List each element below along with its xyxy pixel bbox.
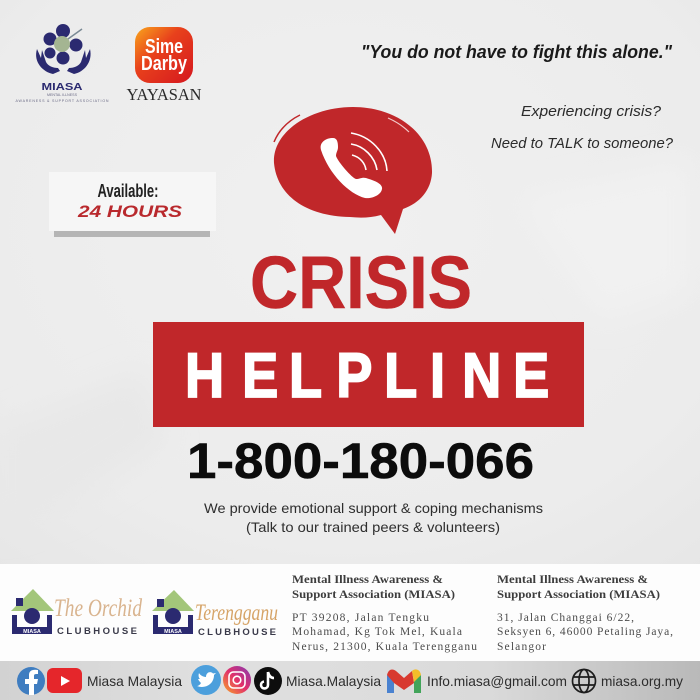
logo: Terengganu Clubhouse: MIASA <box>164 629 182 635</box>
callout text: Available: <box>98 181 158 201</box>
address: Kuala Terengganu: Nerus, 21300, Kuala Terengganu <box>292 641 477 653</box>
logo: The Orchid Clubhouse: CLUBHOUSE <box>57 626 137 637</box>
address: Petaling Jaya: Seksyen 6, 46000 Petaling Jaya, <box>497 626 673 638</box>
icon: globe <box>572 670 596 692</box>
address: Petaling Jaya: Selangor <box>497 641 546 653</box>
label: Miasa Malaysia: Miasa Malaysia <box>87 673 182 689</box>
banner: HELPLINE <box>153 322 584 427</box>
phone number: 1-800-180-066 <box>187 433 534 489</box>
callout: available 24 hours <box>49 172 216 237</box>
callout panel <box>49 172 216 231</box>
question text <box>491 104 674 152</box>
logo: MIASA <box>16 24 109 103</box>
panel: social bar <box>0 661 700 700</box>
address: Kuala Terengganu <box>292 574 477 653</box>
label: website: miasa.org.my <box>601 673 683 689</box>
icon: Sime Darby badge <box>135 27 193 83</box>
icon: Twitter <box>191 665 221 695</box>
support description: We provide emotional support & coping mechanisms <box>204 500 543 516</box>
question text: Experiencing crisis? <box>521 104 662 120</box>
callout shadow <box>54 230 210 237</box>
banner: HELPLINE: HELPLINE <box>185 341 549 411</box>
logo: Terengganu Clubhouse: CLUBHOUSE <box>198 627 276 638</box>
logo: The Orchid Clubhouse: MIASA <box>23 629 41 635</box>
label: email: Info.miasa@gmail.com <box>427 673 567 689</box>
MIASA wordmark: MIASA <box>42 81 83 93</box>
YAYASAN wordmark: YAYASAN <box>126 85 202 104</box>
question text: Need to TALK to someone? <box>491 136 674 152</box>
address: Kuala Terengganu: Support Association (MIASA) <box>292 589 455 601</box>
support description <box>204 500 543 535</box>
panel: footer <box>0 564 700 661</box>
icon: telephone handset <box>321 133 387 198</box>
address: Petaling Jaya: Support Association (MIASA) <box>497 589 660 601</box>
MIASA tagline: AWARENESS & SUPPORT ASSOCIATION <box>16 99 109 103</box>
address: Petaling Jaya: 31, Jalan Changgai 6/22, <box>497 612 634 624</box>
MIASA tagline: MENTAL ILLNESS <box>47 93 78 97</box>
address: Kuala Terengganu: Mental Illness Awareness & <box>292 574 443 586</box>
heading: CRISIS: CRISIS <box>250 241 472 324</box>
address: Kuala Terengganu: PT 39208, Jalan Tengku <box>292 612 429 624</box>
icon: TikTok <box>254 667 282 695</box>
icon: Sime Darby badge: Darby <box>141 53 188 75</box>
address: Petaling Jaya: Mental Illness Awareness & <box>497 574 648 586</box>
icon: Gmail <box>387 669 421 693</box>
icon: Instagram <box>223 666 251 694</box>
label: Miasa.Malaysia: Miasa.Malaysia <box>286 673 381 689</box>
MIASA tagline <box>16 93 109 103</box>
icon: Sime Darby badge: Sime <box>145 36 183 58</box>
icon: red speech bubble with phone <box>274 107 432 234</box>
logo: The Orchid Clubhouse: The Orchid <box>54 595 142 622</box>
callout: available 24 hours: 24 HOURS <box>77 202 183 221</box>
logo: Terengganu Clubhouse: Terengganu <box>195 600 278 625</box>
support description: (Talk to our trained peers & volunteers) <box>246 519 500 535</box>
address: Petaling Jaya <box>497 574 673 653</box>
icon: flower and hands <box>36 24 91 74</box>
logo: Sime Darby Yayasan <box>126 27 202 104</box>
icon: Facebook <box>17 667 45 695</box>
logo: The Orchid Clubhouse <box>11 589 142 637</box>
address: Kuala Terengganu: Mohamad, Kg Tok Mel, Kuala <box>292 626 462 638</box>
icon: YouTube <box>47 668 82 693</box>
quote heading: "You do not have to fight this alone." <box>361 42 672 62</box>
logo: Terengganu Clubhouse <box>152 590 278 638</box>
